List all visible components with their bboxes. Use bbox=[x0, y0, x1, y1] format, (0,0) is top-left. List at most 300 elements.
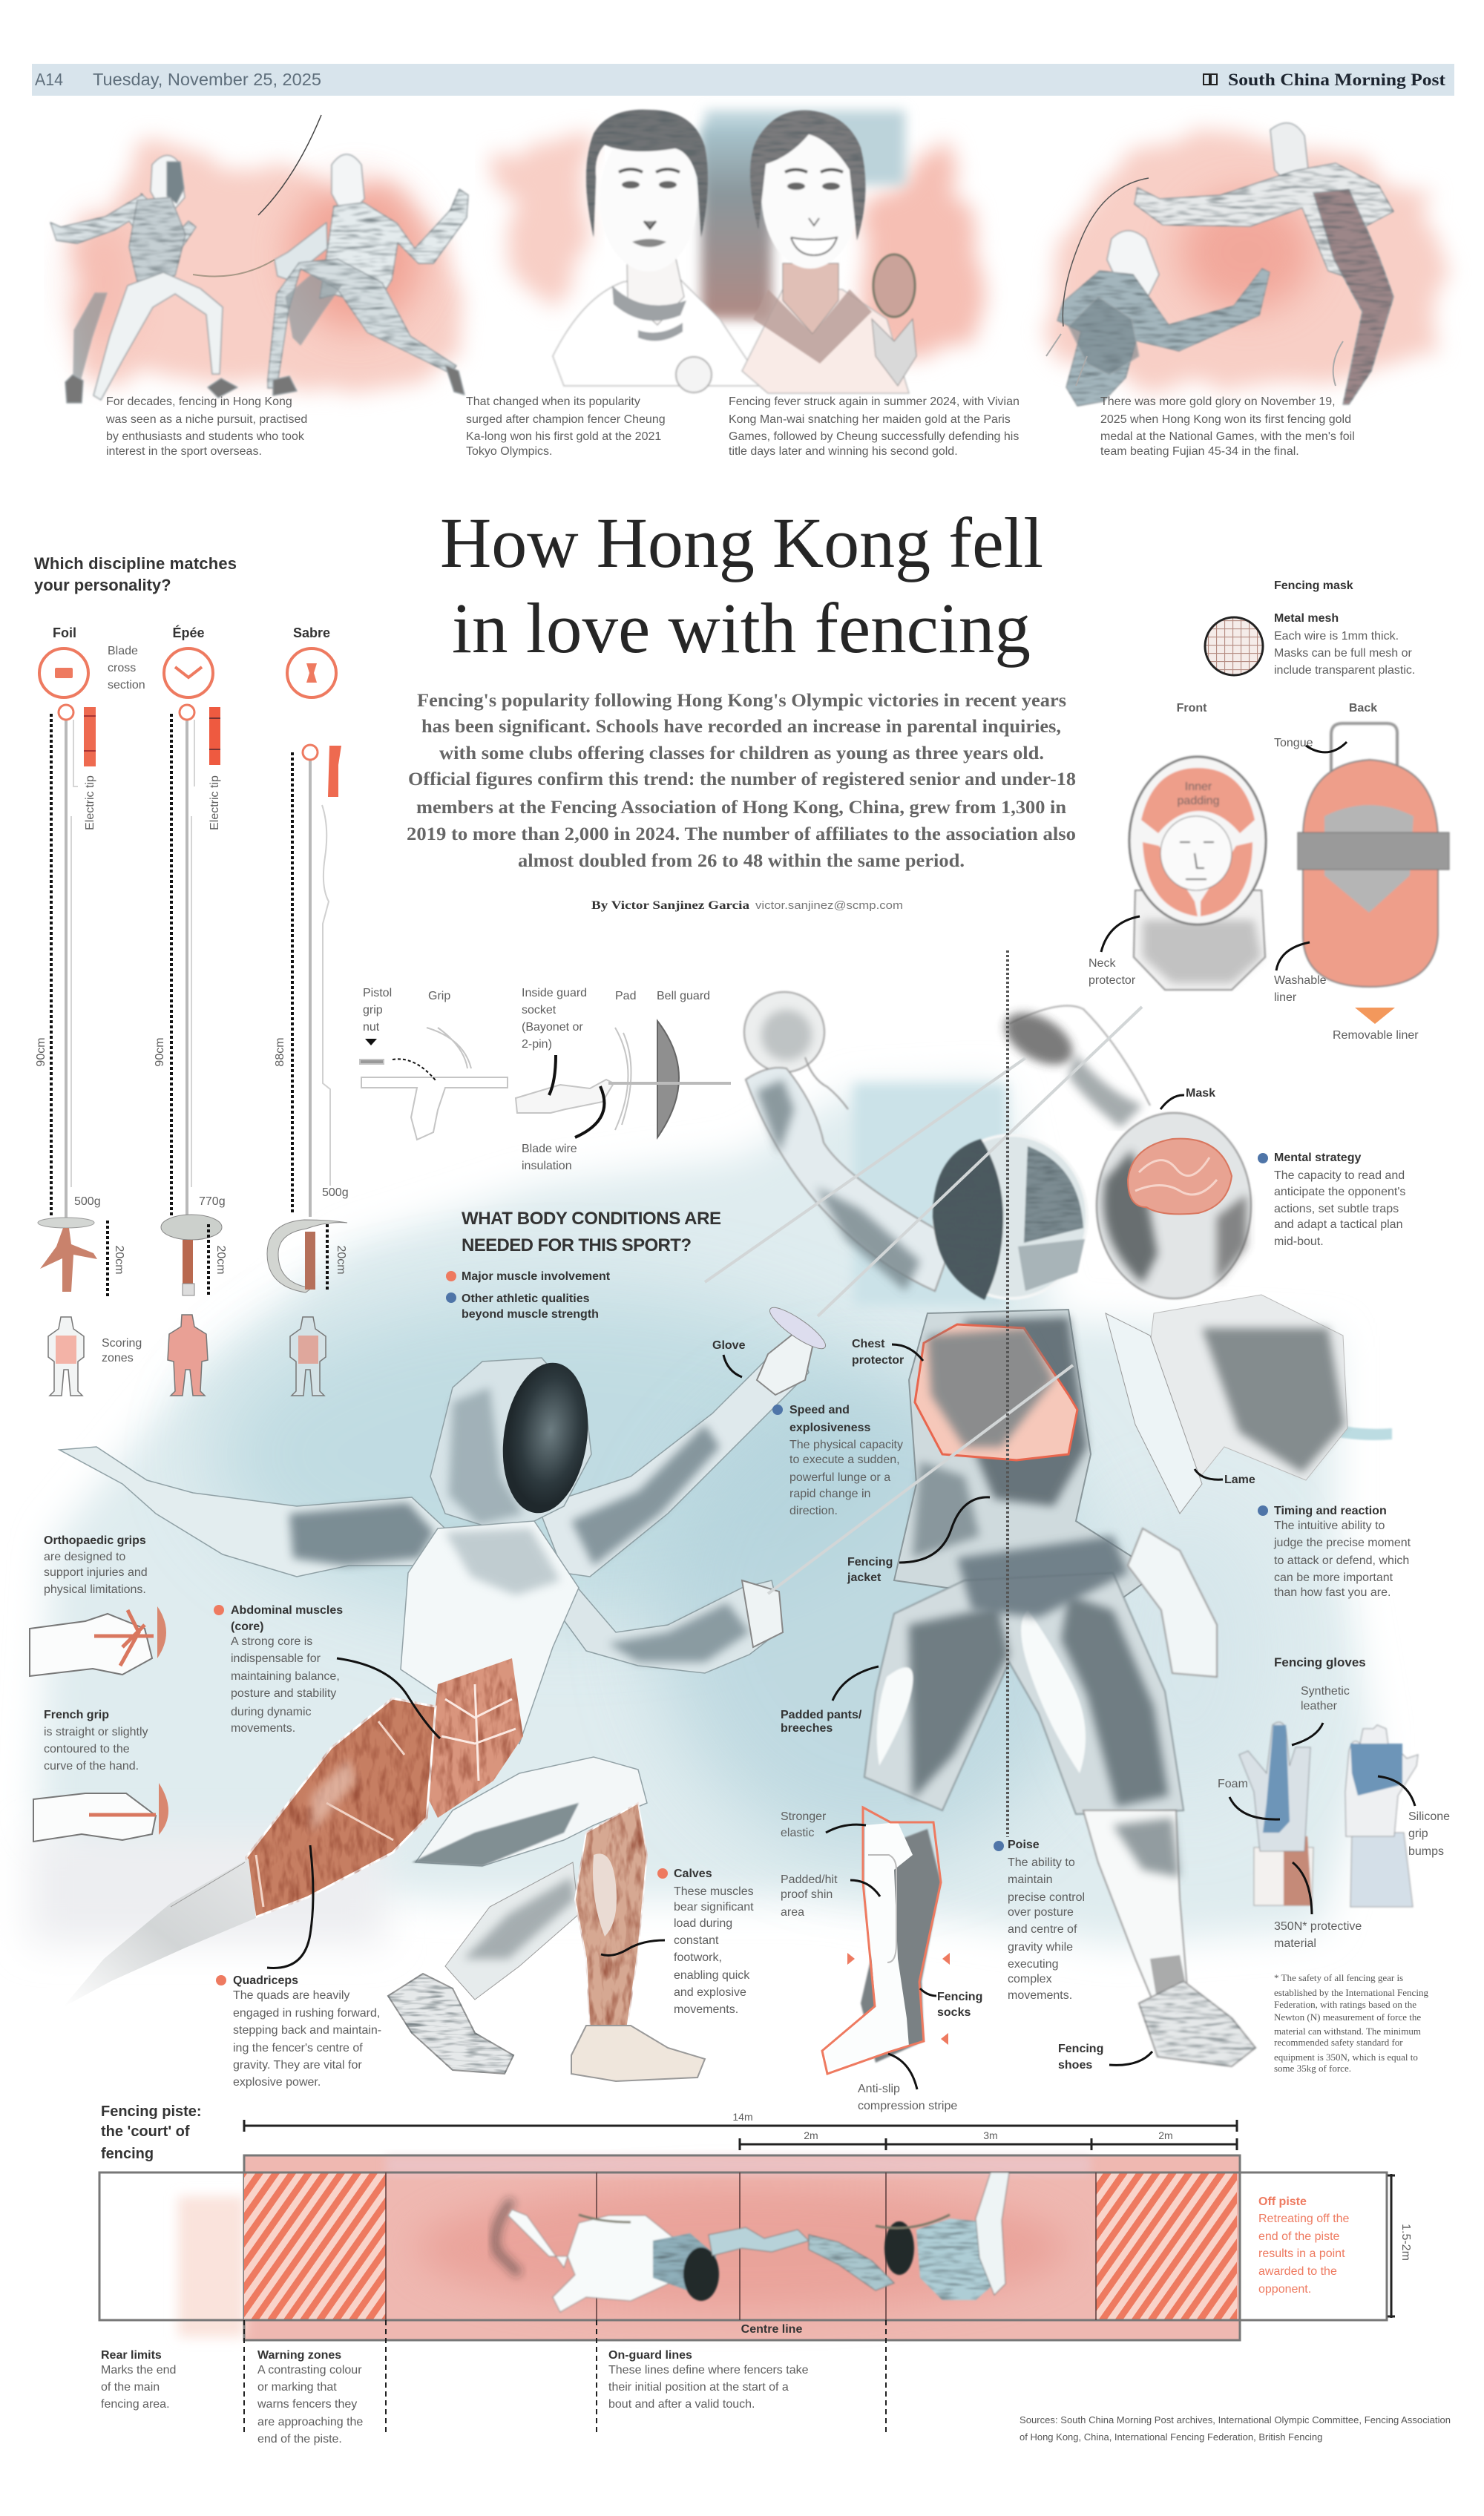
grip labels: Grip bbox=[428, 990, 450, 1002]
icon: epee cross section bbox=[164, 648, 213, 697]
dimension: 14m: 14m bbox=[732, 2111, 753, 2123]
callout: poise: movements. bbox=[1008, 1989, 1072, 2002]
label: fencing jacket bbox=[847, 1497, 990, 1584]
mask front bbox=[1129, 757, 1266, 990]
callout: quadriceps: stepping back and maintain- bbox=[233, 2024, 381, 2037]
callout: quadriceps: engaged in rushing forward, bbox=[233, 2007, 380, 2020]
label: padded pants: breeches bbox=[781, 1722, 833, 1735]
dimension: 14m bbox=[244, 2111, 1237, 2132]
label: chest protector: protector bbox=[852, 1354, 904, 1367]
front thigh bbox=[412, 1757, 647, 1866]
text: warning zones: warns fencers they bbox=[257, 2398, 357, 2411]
calf muscles bbox=[575, 1803, 647, 2029]
label: padded pants bbox=[781, 1666, 879, 1735]
glove labels: Silicone bbox=[1408, 1810, 1450, 1823]
captions under top illustrations: 2025 when Hong Kong won its first fencing gold bbox=[1100, 413, 1351, 426]
captions under top illustrations: Kong Man-wai snatching her maiden gold at the Paris bbox=[729, 413, 1011, 426]
glove labels: Synthetic bbox=[1301, 1685, 1350, 1698]
label: glove: Glove bbox=[712, 1339, 746, 1352]
leader lines for mask bbox=[1101, 742, 1347, 970]
callout: calves: constant bbox=[674, 1934, 719, 1947]
epee weapon: 770g bbox=[199, 1195, 226, 1208]
french grip text: French grip bbox=[44, 1709, 109, 1721]
captions under top illustrations: Games, followed by Cheung successfully defending his bbox=[729, 430, 1019, 443]
grip labels: nut bbox=[363, 1021, 380, 1034]
illustration: fencers lunging bbox=[1046, 123, 1439, 406]
callout: abdominal muscles bbox=[214, 1604, 440, 1738]
grip labels: Pad bbox=[615, 990, 636, 1002]
grip labels: Bell guard bbox=[657, 990, 710, 1002]
callout: mental strategy bbox=[1258, 1152, 1405, 1248]
intro text: with some clubs offering classes for children as young as three years old. bbox=[439, 743, 1044, 763]
text: on-guard lines: their initial position at the start of a bbox=[608, 2381, 789, 2394]
title: How Hong Kong fell bbox=[440, 503, 1043, 582]
heading: which discipline: Which discipline matches bbox=[34, 554, 237, 573]
callout: speed and explosiveness: rapid change in bbox=[789, 1488, 870, 1500]
heading: body conditions: WHAT BODY CONDITIONS ARE bbox=[462, 1209, 721, 1229]
label: stronger elastic: elastic bbox=[781, 1827, 814, 1839]
mask view labels: Front bbox=[1177, 702, 1207, 715]
raised arm and bell guard bbox=[744, 992, 953, 1291]
intro text bbox=[407, 691, 1076, 871]
text: on-guard lines: On-guard lines bbox=[608, 2349, 692, 2362]
label: centre line: Centre line bbox=[741, 2323, 802, 2336]
french grip text: is straight or slightly bbox=[44, 1726, 148, 1738]
footnote: equipment is 350N, which is equal to bbox=[1274, 2052, 1418, 2063]
heading: body conditions: NEEDED FOR THIS SPORT? bbox=[462, 1235, 692, 1255]
central fencer bbox=[744, 992, 1255, 2074]
callout: poise: gravity while bbox=[1008, 1941, 1073, 1954]
captions under top illustrations: team beating Fujian 45-34 in the final. bbox=[1100, 445, 1299, 458]
text: on-guard lines: bout and after a valid touch. bbox=[608, 2398, 755, 2411]
callout: timing and reaction: to attack or defend, which bbox=[1274, 1554, 1409, 1567]
orthopaedic grip text: support injuries and bbox=[44, 1566, 148, 1579]
text: warning zones: Warning zones bbox=[257, 2349, 341, 2362]
callout: calves bbox=[601, 1868, 754, 2016]
captions under top illustrations: was seen as a niche pursuit, practised bbox=[105, 413, 307, 426]
callout: poise bbox=[994, 1839, 1085, 2002]
callout: mental strategy: actions, set subtle traps bbox=[1274, 1203, 1399, 1215]
panel: discipline comparison bbox=[34, 554, 349, 1396]
icon: french grip hand bbox=[33, 1783, 168, 1842]
text: warning zones: or marking that bbox=[257, 2381, 337, 2394]
callout: mental strategy: mid-bout. bbox=[1274, 1235, 1324, 1248]
callout: mental strategy: The capacity to read and bbox=[1274, 1169, 1405, 1182]
footnote: material can withstand. The minimum bbox=[1274, 2026, 1421, 2037]
mask heading and mesh text: Masks can be full mesh or bbox=[1274, 647, 1413, 660]
arrow: removable liner bbox=[1355, 1008, 1395, 1024]
glove labels: grip bbox=[1408, 1827, 1428, 1840]
panel: grip types bbox=[30, 1534, 168, 1842]
label: stronger elastic bbox=[781, 1810, 866, 1839]
callout: calves: footwork, bbox=[674, 1951, 722, 1964]
callout: mental strategy: Mental strategy bbox=[1274, 1152, 1361, 1164]
sabre weapon: 88cm bbox=[274, 1037, 286, 1067]
icon: foil cross section bbox=[39, 648, 88, 697]
text: rear limits: fencing area. bbox=[101, 2398, 170, 2411]
label: fencing shoes: Fencing bbox=[1058, 2043, 1103, 2055]
callout: speed and explosiveness: direction. bbox=[789, 1505, 838, 1517]
callout: speed and explosiveness: Speed and bbox=[789, 1404, 850, 1416]
captions under top illustrations: That changed when its popularity bbox=[466, 395, 640, 408]
footnote: recommended safety standard for bbox=[1274, 2037, 1403, 2048]
text: off piste: results in a point bbox=[1258, 2247, 1345, 2260]
orthopaedic grip text: physical limitations. bbox=[44, 1583, 146, 1596]
callout: poise: and centre of bbox=[1008, 1923, 1077, 1936]
foil weapon: 20cm bbox=[113, 1245, 125, 1275]
captions under top illustrations: There was more gold glory on November 19, bbox=[1100, 395, 1336, 408]
glove labels: bumps bbox=[1408, 1845, 1444, 1858]
scoring zones figures bbox=[48, 1315, 326, 1396]
text: rear limits: of the main bbox=[101, 2381, 160, 2394]
foil weapon: Electric tip bbox=[84, 775, 96, 830]
label: blade cross section: cross bbox=[108, 662, 136, 674]
mask heading and mesh text: Each wire is 1mm thick. bbox=[1274, 630, 1399, 643]
mask heading and mesh text: Fencing mask bbox=[1274, 579, 1353, 592]
text: rear limits: Rear limits bbox=[101, 2349, 162, 2362]
mask labels: Washable bbox=[1274, 974, 1327, 987]
label: fencing jacket: Fencing bbox=[847, 1556, 893, 1569]
label: blade cross section: section bbox=[108, 679, 145, 692]
header bar: South China Morning Post bbox=[1228, 70, 1445, 89]
dimensions: 2m 3m 2m: 2m bbox=[804, 2129, 818, 2141]
callout: calves: and explosive bbox=[674, 1986, 746, 1999]
glove labels: leather bbox=[1301, 1700, 1338, 1712]
label: stronger elastic: Stronger bbox=[781, 1810, 827, 1823]
callout: timing and reaction: The intuitive ability to bbox=[1274, 1520, 1385, 1532]
captions under top illustrations: interest in the sport overseas. bbox=[106, 445, 262, 458]
foil blades bbox=[705, 1007, 1142, 1594]
rear shin bbox=[445, 1862, 579, 2000]
callout: speed and explosiveness: to execute a sudden, bbox=[789, 1454, 900, 1466]
header bar: A14 bbox=[35, 70, 63, 89]
glove leader lines bbox=[1229, 1723, 1415, 1914]
piste heading: Fencing piste: bbox=[101, 2103, 202, 2120]
orange-outlined fencing sock bbox=[822, 1807, 950, 2074]
mask labels: Neck bbox=[1089, 957, 1116, 970]
foil weapon bbox=[35, 705, 125, 1296]
mask front: padding bbox=[1178, 795, 1219, 807]
callout: abdominal muscles: posture and stability bbox=[231, 1687, 336, 1700]
label: fencing shoes bbox=[1058, 2043, 1152, 2072]
grip labels: Blade wire bbox=[522, 1143, 577, 1155]
callout: timing and reaction bbox=[1258, 1505, 1411, 1599]
callout: abdominal muscles: maintaining balance, bbox=[231, 1670, 340, 1683]
foil weapon: 90cm bbox=[35, 1037, 47, 1067]
footnote: established by the International Fencing bbox=[1274, 1987, 1428, 1998]
mask labels: protector bbox=[1089, 974, 1136, 987]
panel: weapon grip anatomy bbox=[360, 987, 731, 1172]
white torso bbox=[401, 1521, 579, 1744]
intro text: members at the Fencing Association of Hong Kong, China, grew from 1,300 in bbox=[416, 798, 1066, 818]
captions under top illustrations: Fencing fever struck again in summer 2024, with Vivian bbox=[729, 395, 1020, 408]
illustration: fencers en garde bbox=[50, 115, 468, 403]
label: mask bbox=[1160, 1087, 1215, 1109]
discipline names: Épée bbox=[172, 625, 205, 640]
discipline names: Foil bbox=[53, 625, 76, 640]
intro text: almost doubled from 26 to 48 within the same period. bbox=[518, 851, 965, 871]
mask back bbox=[1298, 723, 1449, 987]
foil weapon: 500g bbox=[74, 1195, 101, 1208]
mask labels: Tongue bbox=[1274, 737, 1313, 749]
byline: victor.sanjinez@scmp.com bbox=[755, 899, 903, 912]
label: shin area: proof shin bbox=[781, 1888, 833, 1901]
intro text: Fencing's popularity following Hong Kong's Olympic victories in recent years bbox=[417, 691, 1066, 711]
grip labels: grip bbox=[363, 1004, 383, 1016]
captions under top illustrations: Ka-long won his first gold at the 2021 bbox=[466, 430, 661, 443]
rear fencer body bbox=[1106, 1295, 1347, 1514]
title: in love with fencing bbox=[452, 588, 1031, 668]
mask labels: Removable liner bbox=[1333, 1029, 1419, 1042]
title bbox=[440, 503, 1043, 668]
text: off piste: end of the piste bbox=[1258, 2230, 1340, 2243]
french grip text: contoured to the bbox=[44, 1743, 130, 1755]
callout: calves: Calves bbox=[674, 1868, 712, 1880]
callout: timing and reaction: judge the precise moment bbox=[1273, 1537, 1411, 1549]
dashed drop lines bbox=[244, 2320, 886, 2435]
callout: timing and reaction: can be more important bbox=[1274, 1571, 1393, 1584]
panel: fencing piste bbox=[99, 2103, 1412, 2446]
top-view fencers bbox=[496, 2172, 1009, 2312]
glove labels: 350N* protective bbox=[1274, 1920, 1362, 1933]
glove labels: Foam bbox=[1218, 1778, 1248, 1790]
header bar bbox=[32, 64, 1454, 96]
label: chest protector bbox=[852, 1338, 923, 1367]
callout: timing and reaction: Timing and reaction bbox=[1274, 1505, 1387, 1517]
callout: quadriceps: gravity. They are vital for bbox=[233, 2059, 362, 2072]
callout: quadriceps: Quadriceps bbox=[233, 1974, 298, 1987]
footnote: * The safety of all fencing gear is bbox=[1274, 1972, 1403, 1983]
captions under top illustrations: Tokyo Olympics. bbox=[466, 445, 552, 458]
callout: calves: load during bbox=[674, 1917, 732, 1930]
piste outlines bbox=[244, 2155, 1240, 2340]
captions under top illustrations: title days later and winning his second gold. bbox=[729, 445, 958, 458]
glove labels: material bbox=[1274, 1937, 1316, 1950]
heading: which discipline: your personality? bbox=[34, 576, 171, 594]
panel: fencing mask bbox=[1089, 579, 1449, 1042]
grip drawing bbox=[360, 1021, 731, 1140]
legend: muscle vs athletic: beyond muscle strength bbox=[462, 1308, 599, 1321]
callout: poise: complex bbox=[1008, 1973, 1052, 1985]
mask labels: liner bbox=[1274, 991, 1297, 1004]
piste heading: the 'court' of bbox=[101, 2124, 190, 2140]
sources: Sources: South China Morning Post archives, International Olympic Committee, Fencing Association bbox=[1020, 2414, 1451, 2425]
grip labels: Inside guard bbox=[522, 987, 587, 999]
icon: glove side view bbox=[1239, 1722, 1313, 1905]
callout: timing and reaction: than how fast you are. bbox=[1274, 1586, 1391, 1599]
icon: glove palm view bbox=[1345, 1725, 1418, 1907]
callout: quadriceps: ing the fencer's centre of bbox=[233, 2042, 363, 2054]
callout: quadriceps bbox=[216, 1845, 381, 2089]
sabre weapon: 500g bbox=[322, 1186, 349, 1199]
main piste rectangle bbox=[99, 2172, 1387, 2320]
dimension: width bbox=[1388, 2174, 1412, 2318]
illustration: portraits of Cheung Ka-long and Vivian Kong bbox=[493, 110, 983, 393]
text: on-guard lines: These lines define where fencers take bbox=[608, 2364, 809, 2377]
callout: poise: precise control bbox=[1008, 1891, 1085, 1904]
callout: poise: maintain bbox=[1008, 1873, 1052, 1886]
legend: muscle vs athletic: Other athletic qualities bbox=[462, 1293, 590, 1305]
callout: speed and explosiveness: powerful lunge or a bbox=[789, 1471, 890, 1484]
intro text: 2019 to more than 2,000 in 2024. The number of affiliates to the association also bbox=[407, 824, 1076, 844]
text: off piste: Off piste bbox=[1258, 2195, 1307, 2208]
callout: speed and explosiveness bbox=[772, 1404, 903, 1517]
label: lame: Lame bbox=[1224, 1474, 1255, 1486]
hood and mask bbox=[430, 1357, 597, 1532]
label: blade cross section: Blade bbox=[108, 645, 138, 657]
callout: calves: bear significant bbox=[674, 1901, 754, 1914]
callout: abdominal muscles: Abdominal muscles bbox=[231, 1604, 343, 1617]
callout: mental strategy: anticipate the opponent's bbox=[1274, 1186, 1405, 1198]
icon: orthopaedic grip hand bbox=[30, 1606, 166, 1676]
text: warning zones: A contrasting colour bbox=[257, 2364, 362, 2377]
rear shoe bbox=[388, 1974, 513, 2074]
callout: calves: These muscles bbox=[674, 1885, 754, 1898]
upper torso bbox=[894, 1310, 1158, 1610]
callout: mental strategy: and adapt a tactical plan bbox=[1274, 1218, 1402, 1231]
callout: calves: movements. bbox=[674, 2003, 738, 2016]
dimension: width: 1.5-2m bbox=[1399, 2224, 1412, 2261]
blue watercolour wash behind figures bbox=[30, 1083, 1392, 1944]
callout: abdominal muscles: (core) bbox=[231, 1620, 263, 1633]
label: glove bbox=[712, 1339, 746, 1377]
rear ghost fencer with brain bbox=[997, 1002, 1347, 1514]
orthopaedic grip text: Orthopaedic grips bbox=[44, 1534, 146, 1547]
intro text: has been significant. Schools have recorded an increase in parental inquiries, bbox=[421, 717, 1061, 737]
captions under top illustrations: medal at the National Games, with the men's foil bbox=[1100, 430, 1355, 443]
front arm and glove bbox=[538, 1301, 830, 1673]
callout: quadriceps: explosive power. bbox=[233, 2076, 321, 2089]
header bar: Tuesday, November 25, 2025 bbox=[93, 70, 321, 89]
icon: metal mesh bbox=[1205, 617, 1263, 675]
rear fencer arm and guard bbox=[997, 1002, 1150, 1128]
piste heading: fencing bbox=[101, 2146, 154, 2162]
grip labels: Pistol bbox=[363, 987, 392, 999]
text: off piste: Retreating off the bbox=[1258, 2213, 1350, 2225]
epee weapon: 90cm bbox=[154, 1037, 166, 1067]
gloves heading: Fencing gloves bbox=[1274, 1655, 1366, 1669]
front shoe bbox=[571, 2026, 705, 2081]
label: fencing socks: socks bbox=[937, 2006, 971, 2019]
callout: abdominal muscles: during dynamic bbox=[231, 1706, 312, 1718]
label: anti-slip stripe: compression stripe bbox=[858, 2100, 957, 2112]
label: anti-slip stripe bbox=[858, 2054, 957, 2112]
intro text: Official figures confirm this trend: the number of registered senior and under-18 bbox=[408, 769, 1076, 789]
panel: fencing gloves bbox=[1218, 1655, 1450, 2074]
label: fencing socks: Fencing bbox=[937, 1991, 982, 2003]
sources: of Hong Kong, China, International Fencing Federation, British Fencing bbox=[1020, 2431, 1322, 2443]
label: padded pants: Padded pants/ bbox=[781, 1709, 862, 1721]
byline: By Victor Sanjinez Garcia bbox=[591, 899, 749, 912]
grip labels: insulation bbox=[522, 1160, 572, 1172]
captions under top illustrations: surged after champion fencer Cheung bbox=[466, 413, 666, 426]
dimensions: 2m 3m 2m: 2m bbox=[1158, 2129, 1173, 2141]
label: fencing socks bbox=[920, 1988, 982, 2019]
captions under top illustrations: For decades, fencing in Hong Kong bbox=[106, 395, 292, 408]
grip labels: (Bayonet or bbox=[522, 1021, 583, 1034]
mask front: Inner bbox=[1185, 781, 1212, 793]
epee weapon: 20cm bbox=[214, 1245, 227, 1275]
callout: poise: Poise bbox=[1008, 1839, 1040, 1851]
text: off piste: awarded to the bbox=[1258, 2265, 1337, 2278]
label: chest protector: Chest bbox=[852, 1338, 885, 1350]
dimensions: 2m 3m 2m bbox=[740, 2129, 1237, 2150]
sabre weapon bbox=[267, 745, 349, 1293]
byline bbox=[591, 899, 903, 912]
callout: calves: enabling quick bbox=[674, 1969, 750, 1982]
icon: sabre cross section bbox=[287, 648, 336, 697]
callout: speed and explosiveness: The physical capacity bbox=[789, 1439, 903, 1451]
callout: poise: The ability to bbox=[1008, 1856, 1075, 1869]
breeches bbox=[864, 1536, 1183, 1814]
label: anti-slip stripe: Anti-slip bbox=[858, 2083, 900, 2095]
epee weapon bbox=[154, 705, 227, 1296]
callout: abdominal muscles: movements. bbox=[231, 1722, 295, 1735]
legend: muscle vs athletic bbox=[446, 1270, 611, 1321]
quadriceps muscles bbox=[246, 1698, 436, 1917]
piste lines bbox=[386, 2172, 1096, 2320]
callout: abdominal muscles: indispensable for bbox=[231, 1652, 321, 1665]
dimensions: 2m 3m 2m: 3m bbox=[983, 2129, 998, 2141]
chest protector bbox=[915, 1324, 1077, 1460]
callout: poise: over posture bbox=[1008, 1906, 1074, 1919]
centre of gravity dotted line bbox=[1006, 950, 1009, 1837]
rear leg bbox=[63, 1859, 256, 2007]
text: warning zones: end of the piste. bbox=[257, 2433, 342, 2446]
label: scoring zones: zones bbox=[102, 1352, 134, 1364]
right lower leg and shoe bbox=[1083, 1528, 1255, 2066]
discipline names: Sabre bbox=[293, 625, 330, 640]
mask heading and mesh text: Metal mesh bbox=[1274, 612, 1339, 625]
text: off piste: opponent. bbox=[1258, 2283, 1311, 2296]
label: mask: Mask bbox=[1186, 1087, 1215, 1100]
footnote: Newton (N) measurement of force the bbox=[1274, 2011, 1421, 2023]
grip labels: socket bbox=[522, 1004, 556, 1016]
grip labels: 2-pin) bbox=[522, 1038, 552, 1051]
captions under top illustrations: by enthusiasts and students who took bbox=[106, 430, 305, 443]
label: lame bbox=[1195, 1469, 1255, 1486]
text: warning zones: are approaching the bbox=[257, 2416, 363, 2428]
piste red wash bbox=[178, 2155, 1240, 2340]
captions under top illustrations bbox=[105, 395, 1355, 458]
footnote: Federation, with ratings based on the bbox=[1274, 1999, 1416, 2010]
label: scoring zones: Scoring bbox=[102, 1337, 142, 1350]
epee weapon: Electric tip bbox=[209, 775, 221, 830]
mask view labels: Back bbox=[1349, 702, 1377, 715]
rear mask bbox=[1097, 1113, 1251, 1298]
label: shin area: area bbox=[781, 1906, 804, 1919]
text: rear limits: Marks the end bbox=[101, 2364, 176, 2377]
legend: muscle vs athletic: Major muscle involvement bbox=[462, 1270, 611, 1283]
brain bbox=[1128, 1139, 1232, 1214]
mask bbox=[933, 1135, 1087, 1300]
warning zones bbox=[244, 2172, 1237, 2320]
callout: quadriceps: The quads are heavily bbox=[233, 1989, 349, 2002]
mask heading and mesh text: include transparent plastic. bbox=[1274, 664, 1415, 677]
rear arm bbox=[59, 1447, 445, 1577]
callout: speed and explosiveness: explosiveness bbox=[789, 1422, 871, 1434]
footnote: some 35kg of force. bbox=[1274, 2063, 1351, 2074]
label: fencing shoes: shoes bbox=[1058, 2059, 1092, 2072]
orthopaedic grip text: are designed to bbox=[44, 1551, 125, 1563]
abdominal muscles bbox=[427, 1658, 523, 1818]
label: fencing jacket: jacket bbox=[847, 1571, 881, 1584]
label: shin area bbox=[781, 1873, 880, 1919]
sabre weapon: 20cm bbox=[335, 1245, 347, 1275]
callout: abdominal muscles: A strong core is bbox=[231, 1635, 312, 1648]
french grip text: curve of the hand. bbox=[44, 1760, 139, 1773]
callout: poise: executing bbox=[1008, 1958, 1058, 1971]
